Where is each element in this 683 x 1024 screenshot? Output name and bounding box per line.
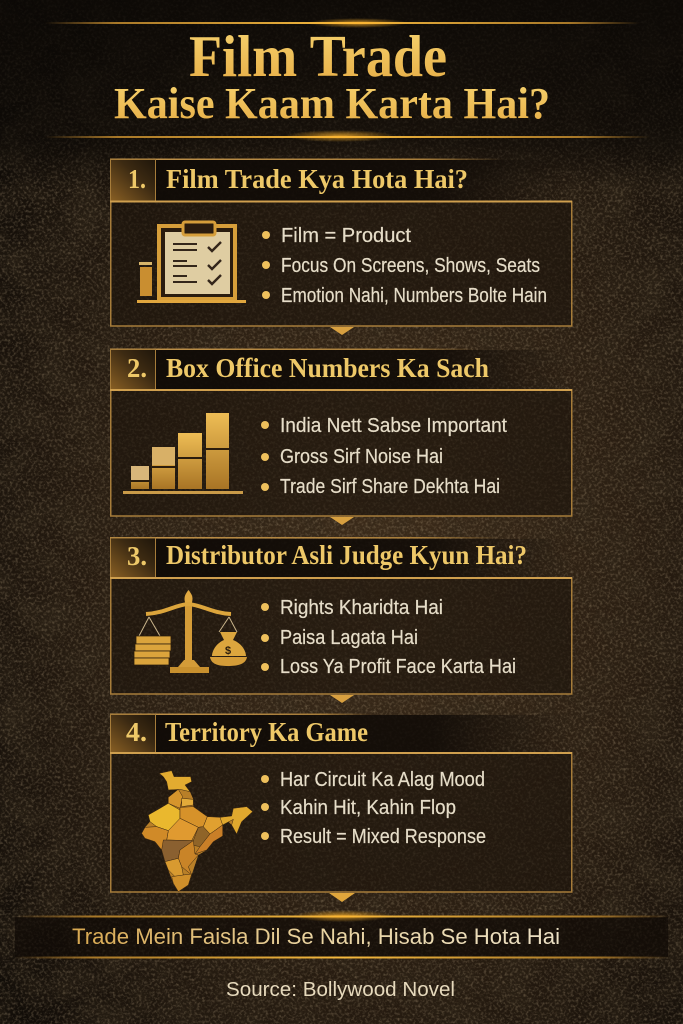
bullet list 1 — [262, 225, 547, 307]
footer tagline: Trade Mein Faisla Dil Se Nahi, Hisab Se Hota Hai — [72, 924, 560, 949]
bullet list 3: Paisa Lagata Hai — [280, 627, 418, 649]
arrow 2 — [330, 517, 354, 525]
bullet list 1: Film = Product — [281, 225, 411, 247]
icon: clipboard checklist — [137, 222, 246, 303]
bullet list 2: Trade Sirf Share Dekhta Hai — [280, 476, 500, 498]
bullet list 1: Focus On Screens, Shows, Seats — [281, 255, 540, 277]
bullet list 2: India Nett Sabse Important — [280, 415, 507, 437]
bullet list 4 — [261, 769, 486, 848]
panel 4: Territory Ka Game — [110, 714, 572, 902]
icon: balance scale — [134, 590, 247, 673]
icon: India map — [142, 771, 253, 892]
arrow 4 — [329, 893, 355, 902]
number badge 2: 2. — [127, 353, 147, 383]
number badge 2 — [110, 350, 156, 390]
arrow 3 — [330, 695, 354, 703]
heading 3: Distributor Asli Judge Kyun Hai? — [166, 540, 527, 570]
icon: bar chart — [123, 413, 243, 494]
title: Film Trade: Film Trade — [189, 23, 447, 89]
bullet list 4: Har Circuit Ka Alag Mood — [280, 769, 485, 791]
icon: balance scale: $ — [225, 645, 231, 657]
number badge 3: 3. — [127, 541, 147, 571]
footer banner — [15, 910, 670, 958]
bullet list 3: Loss Ya Profit Face Karta Hai — [280, 656, 516, 678]
bullet list 4: Kahin Hit, Kahin Flop — [280, 797, 456, 819]
number badge 1: 1. — [128, 164, 146, 194]
number badge 1 — [110, 160, 156, 202]
title block — [45, 18, 650, 142]
bullet list 3: Rights Kharidta Hai — [280, 597, 443, 619]
number badge 3 — [110, 538, 156, 578]
heading 4: Territory Ka Game — [165, 717, 368, 747]
number badge 4: 4. — [126, 717, 147, 747]
heading 1: Film Trade Kya Hota Hai? — [166, 164, 468, 194]
arrow 1 — [330, 327, 354, 335]
bullet list 2: Gross Sirf Noise Hai — [280, 446, 443, 468]
bullet list 1: Emotion Nahi, Numbers Bolte Hain — [281, 285, 547, 307]
bullet list 2 — [261, 415, 507, 498]
bullet list 4: Result = Mixed Response — [280, 826, 486, 848]
heading 2: Box Office Numbers Ka Sach — [166, 353, 489, 383]
panel 2: Box Office Numbers Ka Sach — [110, 348, 572, 525]
panel 1: Film Trade Kya Hota Hai — [110, 158, 572, 335]
title: Kaise Kaam Karta Hai: Kaise Kaam Karta Hai? — [114, 79, 550, 128]
number badge 4 — [110, 714, 156, 754]
bullet list 3 — [261, 597, 516, 678]
panel 3: Distributor Asli Judge Kyun Hai — [110, 537, 572, 703]
source credit: Source: Bollywood Novel — [226, 979, 455, 1001]
